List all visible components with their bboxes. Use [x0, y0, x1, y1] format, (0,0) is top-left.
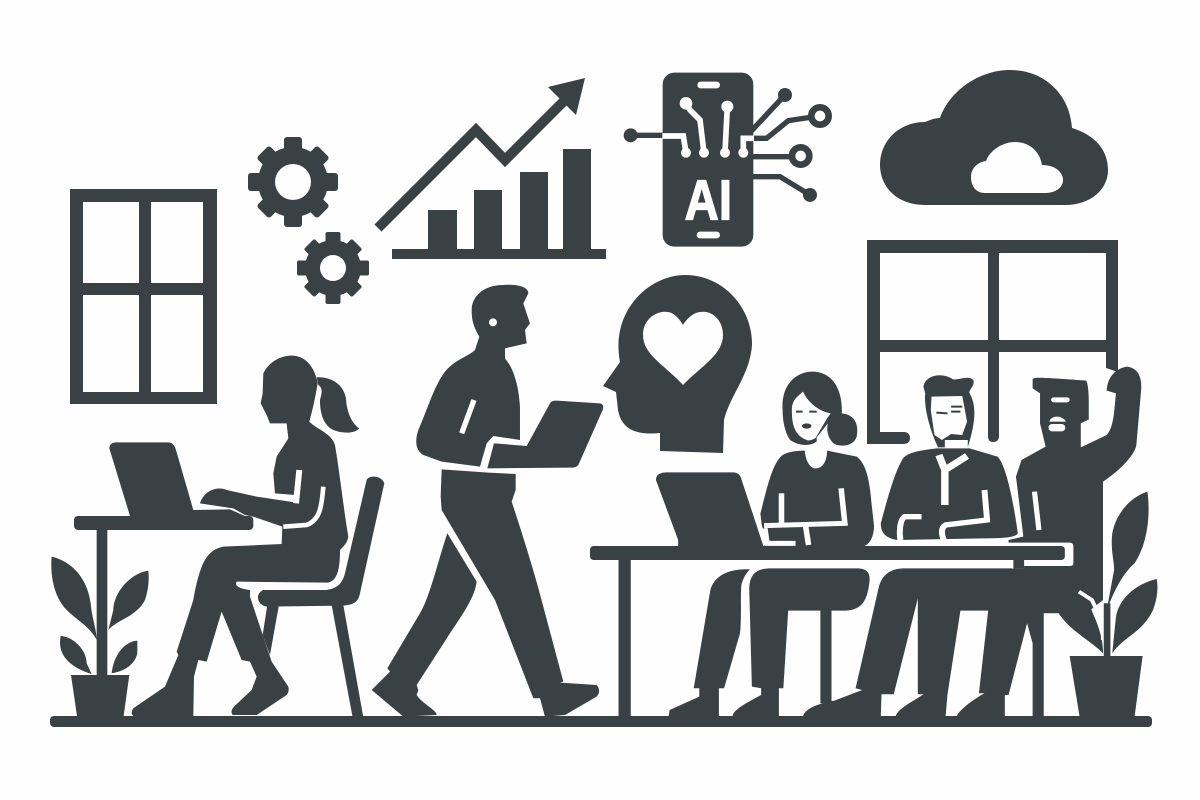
icon: head with heart	[603, 275, 752, 453]
icon: growth bar chart with arrow	[378, 78, 606, 259]
desk	[74, 516, 253, 677]
person: man in middle	[881, 375, 1018, 540]
open laptop	[487, 401, 603, 468]
arm crease	[462, 400, 474, 433]
floor	[50, 716, 1152, 727]
laptop on table	[656, 472, 765, 546]
icon: gears	[248, 137, 369, 304]
chair	[258, 477, 384, 717]
woman with ponytail	[132, 356, 359, 716]
icon: small gear	[297, 232, 369, 304]
plant: left	[51, 557, 149, 718]
walking man with laptop	[372, 285, 603, 717]
person: man with raised arm	[1009, 367, 1141, 613]
legs: woman	[669, 568, 870, 717]
meeting table scene	[590, 367, 1157, 717]
table	[590, 546, 1065, 717]
torso and head	[416, 285, 530, 467]
back leg	[372, 533, 477, 717]
label: AI: AI	[685, 169, 732, 232]
front leg	[441, 469, 599, 717]
laptop	[109, 442, 245, 516]
person: woman with bun	[760, 372, 874, 546]
left desk scene	[51, 356, 384, 718]
table gap around right end	[1005, 543, 1073, 573]
icon: cloud	[880, 70, 1108, 205]
icon: large gear	[248, 137, 338, 227]
left window	[70, 189, 217, 404]
legs: two men	[803, 568, 1083, 717]
icon: AI phone with circuits	[624, 73, 829, 247]
right window	[867, 240, 1118, 444]
ear	[489, 318, 497, 326]
plant: right	[1057, 492, 1157, 717]
